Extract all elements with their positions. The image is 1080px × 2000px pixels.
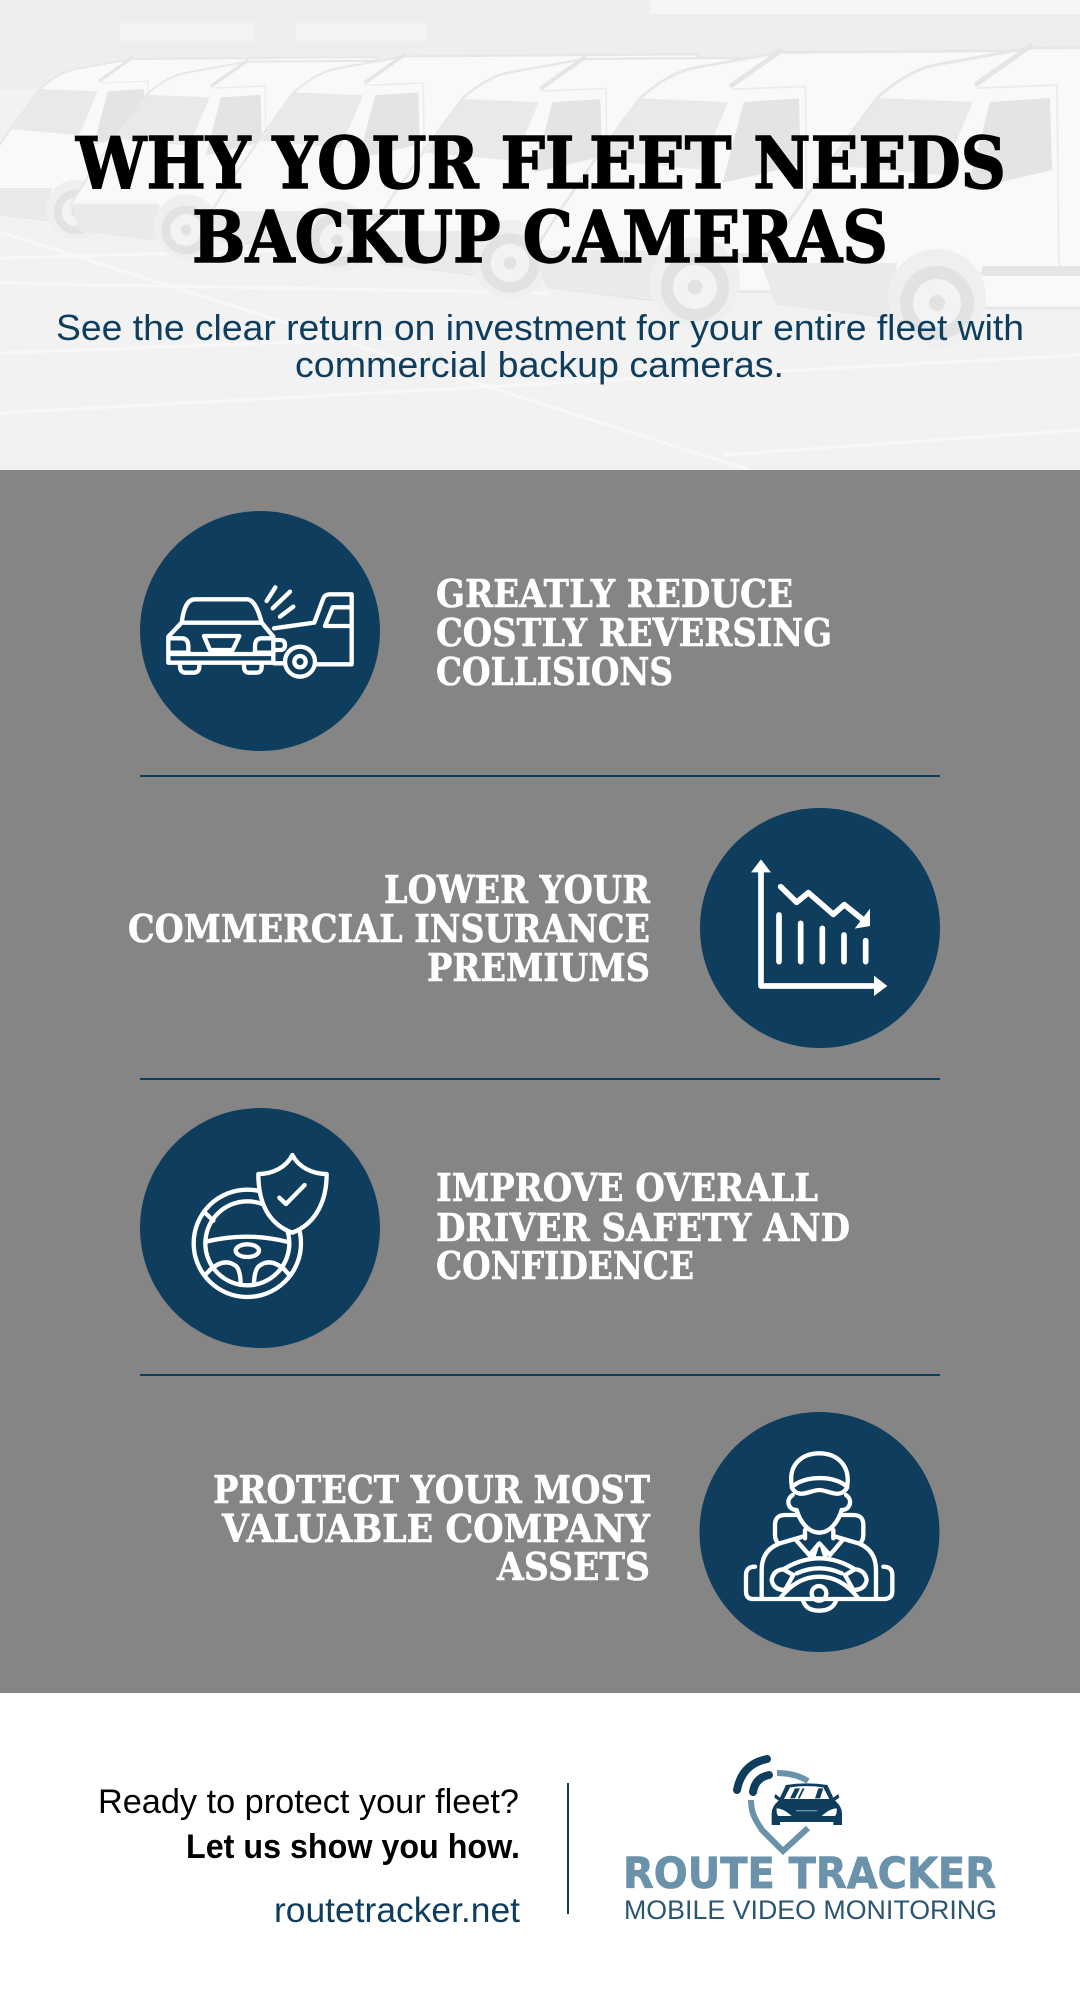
- panel: footer: [0, 1693, 1080, 2000]
- heading: lower premiums: COMMERCIAL INSURANCE: [128, 906, 650, 951]
- heading: protect assets: [213, 1467, 651, 1589]
- heading: reduce collisions: COSTLY REVERSING: [436, 610, 832, 655]
- heading: driver safety: DRIVER SAFETY AND: [436, 1205, 850, 1250]
- icon: car collision: [140, 511, 380, 751]
- icon: driver at wheel: [700, 1412, 940, 1652]
- subtitle: [56, 307, 1024, 385]
- logo wordmark: ROUTE TRACKER: [623, 1849, 996, 1899]
- heading: driver safety: IMPROVE OVERALL: [436, 1165, 818, 1210]
- heading: lower premiums: LOWER YOUR: [384, 867, 650, 912]
- call to action text: [98, 1783, 520, 1930]
- icon: falling chart: [700, 808, 940, 1048]
- call to action text: routetracker.net: [274, 1891, 520, 1930]
- icon: steering wheel with shield: [140, 1108, 380, 1348]
- photo background: parked vans: [0, 0, 1080, 470]
- heading: reduce collisions: COLLISIONS: [436, 649, 673, 694]
- panel: hero with faded van photo: [0, 0, 1080, 470]
- subtitle: commercial backup cameras.: [295, 344, 784, 385]
- icon: logo car: [772, 1783, 842, 1825]
- logo tagline: MOBILE VIDEO MONITORING: [624, 1895, 997, 1925]
- subtitle: See the clear return on investment for your entire fleet with: [56, 307, 1024, 348]
- heading: protect assets: PROTECT YOUR MOST: [213, 1467, 650, 1512]
- icon: location pin: [737, 1759, 808, 1851]
- logo: Route Tracker: [623, 1759, 997, 1925]
- title: BACKUP CAMERAS: [192, 195, 888, 279]
- call to action text: Ready to protect your fleet?: [98, 1783, 519, 1821]
- heading: driver safety: [436, 1165, 850, 1288]
- heading: driver safety: CONFIDENCE: [436, 1243, 694, 1288]
- panel: benefits: [0, 470, 1080, 1693]
- call to action text: Let us show you how.: [186, 1828, 520, 1866]
- heading: lower premiums: PREMIUMS: [427, 945, 650, 990]
- heading: lower premiums: [128, 867, 650, 990]
- heading: reduce collisions: GREATLY REDUCE: [436, 571, 793, 616]
- title: [75, 121, 1006, 279]
- heading: protect assets: VALUABLE COMPANY: [221, 1506, 651, 1551]
- heading: reduce collisions: [436, 571, 832, 694]
- heading: protect assets: ASSETS: [496, 1544, 650, 1589]
